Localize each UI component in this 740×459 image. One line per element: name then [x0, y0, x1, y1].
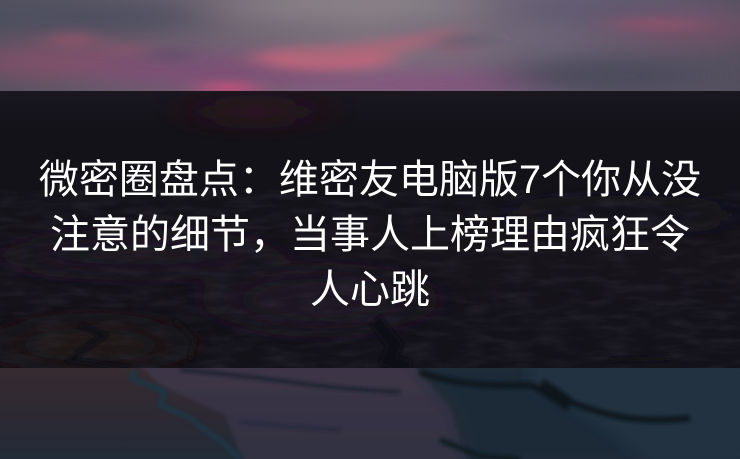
- title line 1: 微密圈盘点：维密友电脑版7个你从没: [39, 158, 701, 202]
- foam on wet sand: [142, 368, 466, 459]
- title line 2: 注意的细节，当事人上榜理由疯狂令: [50, 213, 690, 257]
- dark overlay band over sea: [0, 91, 740, 370]
- teal wave water: [410, 368, 619, 459]
- beach and breaking waves: [0, 360, 740, 459]
- sky with pink clouds: [0, 0, 740, 96]
- title line 3: 人心跳: [310, 268, 430, 312]
